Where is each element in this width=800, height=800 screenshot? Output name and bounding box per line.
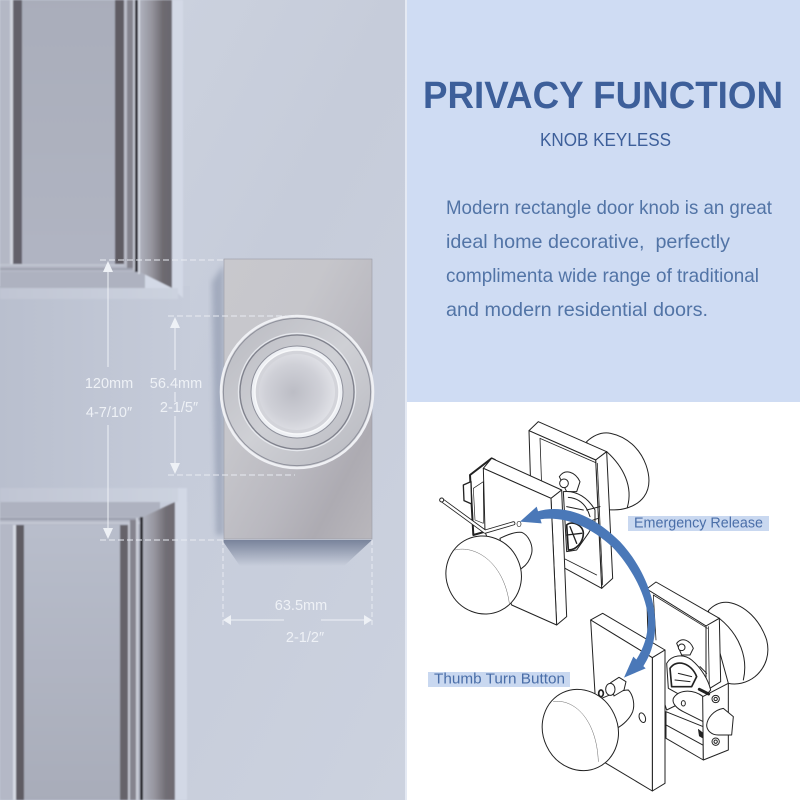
hex key — [440, 498, 513, 532]
text block: description: ideal home decorative, perfectly — [446, 231, 730, 253]
text block: description: and modern residential doors. — [446, 299, 708, 321]
panel: door photo — [0, 0, 408, 800]
label: Thumb Turn Button: Thumb Turn Button — [434, 672, 565, 688]
label: Emergency Release: Emergency Release — [634, 516, 763, 532]
text block: description: Modern rectangle door knob is an great — [446, 197, 773, 219]
dimension: height 120mm — [85, 260, 224, 540]
dimension: knob diameter 56.4mm: 2-1/5″ — [160, 400, 198, 416]
glass knob — [221, 316, 373, 468]
door top panel — [0, 0, 183, 299]
upper lock assembly — [433, 422, 649, 626]
dimension: knob diameter 56.4mm: 56.4mm — [150, 376, 202, 392]
lower lock assembly — [529, 582, 768, 791]
dimension: plate width 63.5mm — [223, 540, 372, 646]
heading: title: PRIVACY FUNCTION — [423, 75, 783, 117]
panel: white diagram background — [407, 402, 800, 800]
door bottom panel — [0, 488, 187, 800]
text block: description — [446, 197, 773, 321]
plate shadow — [212, 264, 372, 566]
dimension: plate width 63.5mm: 2-1/2″ — [286, 630, 324, 646]
door middle rail — [0, 286, 190, 502]
panel: blue description background — [407, 0, 800, 402]
dimension: height 120mm: 120mm — [85, 376, 133, 392]
dimension: knob diameter 56.4mm — [150, 316, 295, 475]
dimension: height 120mm: 4-7/10″ — [86, 405, 132, 421]
panel: metal rectangular plate and knob — [221, 259, 373, 539]
heading: subtitle: KNOB KEYLESS — [540, 130, 671, 150]
dimension: plate width 63.5mm: 63.5mm — [275, 598, 327, 614]
text block: description: complimenta wide range of traditional — [446, 265, 759, 287]
arrow: curved blue arrow between locks — [520, 507, 655, 678]
diagram: lock installation line art — [433, 422, 768, 791]
